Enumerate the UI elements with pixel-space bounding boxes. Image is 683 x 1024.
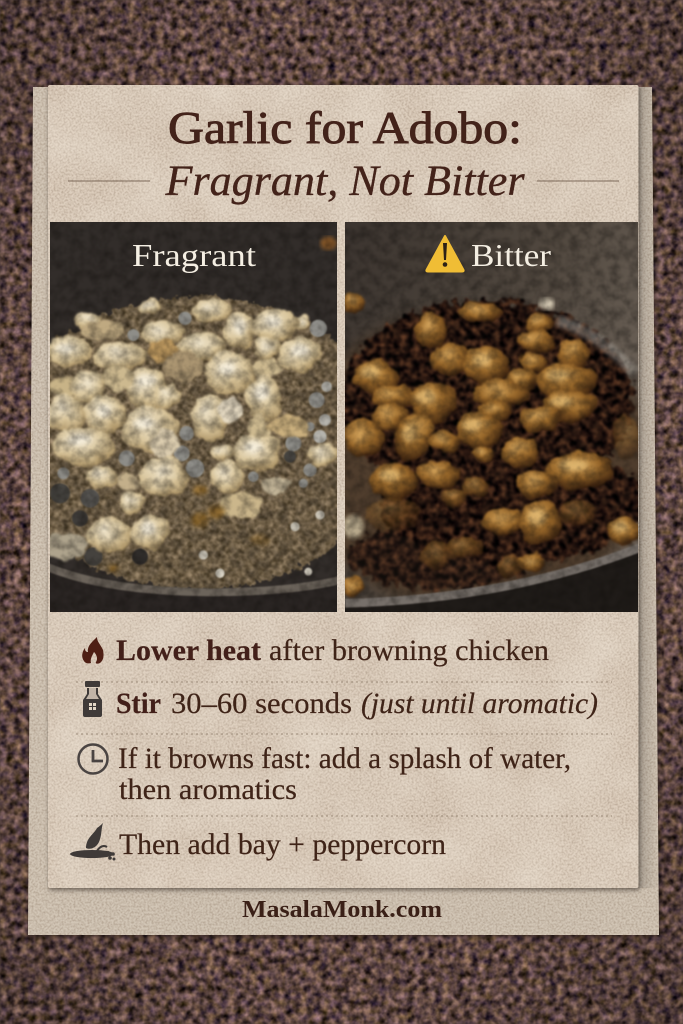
bubbles bbox=[50, 312, 332, 578]
oil pool bbox=[50, 293, 337, 589]
browned garlic pieces bbox=[343, 293, 641, 596]
pale fleck bbox=[539, 298, 554, 310]
browned bit on pan wall bbox=[320, 237, 336, 250]
rim highlight bbox=[47, 567, 340, 592]
oil pool bbox=[345, 348, 638, 596]
panel: front card bbox=[48, 85, 638, 888]
tip: lower heat bbox=[116, 635, 549, 667]
tip: stir: 30–60 seconds bbox=[171, 688, 352, 720]
panel: back card bbox=[20, 80, 670, 940]
pale fleck lower left bbox=[343, 515, 364, 539]
icon: bay and peppercorn bbox=[70, 823, 116, 860]
garlic highlights bbox=[361, 354, 627, 532]
icon: warning triangle bbox=[426, 236, 464, 272]
icon: flame bbox=[82, 637, 104, 664]
photo: fragrant garlic in pan bbox=[50, 222, 337, 612]
tip: browns fast: then aromatics bbox=[119, 774, 297, 806]
tip: stir: Stir bbox=[116, 688, 161, 720]
tip: stir: (just until aromatic) bbox=[361, 688, 598, 720]
icon: clock bbox=[78, 744, 108, 774]
pan rim bbox=[47, 568, 340, 617]
label: Fragrant: Fragrant bbox=[132, 237, 256, 273]
tip: browns fast bbox=[118, 743, 571, 806]
silver oil edge bbox=[557, 320, 635, 373]
subtitle: Fragrant, Not Bitter bbox=[164, 158, 525, 205]
garlic pieces bbox=[44, 299, 339, 558]
label: Bitter: Bitter bbox=[471, 237, 551, 273]
tip: lower heat: after browning chicken bbox=[269, 635, 549, 667]
footer: website: MasalaMonk.com bbox=[242, 897, 442, 923]
icon: bottle bbox=[83, 681, 102, 717]
tip: bay and peppercorn: Then add bay + peppercorn bbox=[119, 829, 446, 861]
tip: browns fast: If it browns fast: add a splash of water, bbox=[118, 743, 571, 775]
photo: bitter garlic in pan bbox=[293, 222, 653, 617]
tip: lower heat: Lower heat bbox=[116, 635, 261, 667]
rim highlight bbox=[345, 548, 640, 603]
tip: stir bbox=[116, 688, 598, 720]
divider lines bbox=[76, 682, 612, 816]
pan bottom and rim bbox=[345, 552, 638, 612]
title: Garlic for Adobo: bbox=[168, 102, 522, 153]
char mass bbox=[340, 300, 647, 590]
garlic highlights bbox=[55, 316, 309, 535]
list: tips bbox=[70, 635, 612, 861]
golden flecks bbox=[109, 485, 270, 572]
